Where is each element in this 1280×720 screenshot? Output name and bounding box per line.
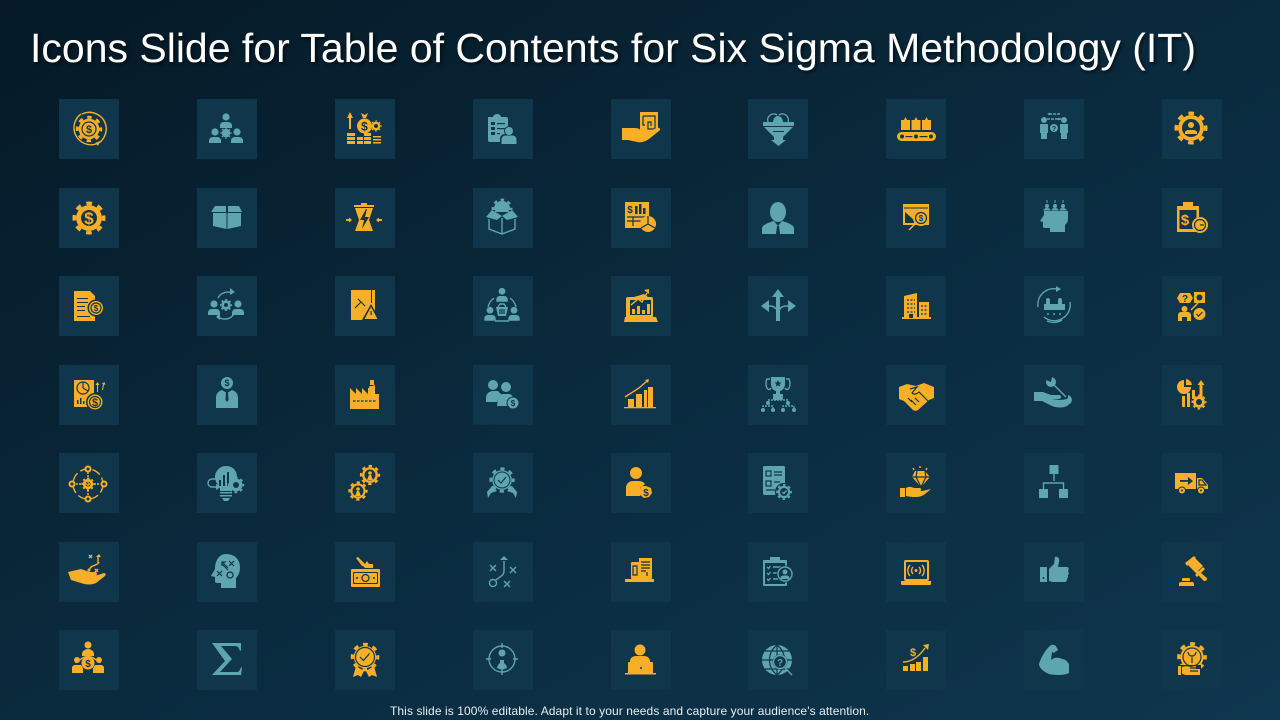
icon: person at laptop bbox=[611, 630, 671, 690]
icon: browser with magnifier: $ bbox=[919, 214, 924, 223]
icon: head with strategy bbox=[197, 542, 257, 602]
icon: globe with question: ? bbox=[777, 658, 783, 669]
icon: box with gear bbox=[473, 188, 533, 248]
icon: laptop with signal bbox=[886, 542, 946, 602]
icon: factory bbox=[335, 365, 395, 425]
icon: trophy hierarchy bbox=[748, 365, 808, 425]
icon: law book with warning bbox=[335, 276, 395, 336]
icon: money bag, gear and coins: $ bbox=[361, 120, 368, 134]
icon: two people with dollar bbox=[473, 365, 533, 425]
icon: network circle with gear bbox=[59, 453, 119, 513]
icon: conveyor with boxes bbox=[886, 99, 946, 159]
icon: laptop with documents bbox=[611, 542, 671, 602]
icon: hand with strategy path bbox=[59, 542, 119, 602]
icon: open box bbox=[197, 188, 257, 248]
icon: delivery truck bbox=[1162, 453, 1222, 513]
icon: gear with dollar and cycle bbox=[59, 99, 119, 159]
icon: clipboard dollar clock bbox=[1162, 188, 1222, 248]
icon: sigma bbox=[197, 630, 257, 690]
icon: businessman bbox=[748, 188, 808, 248]
icon: org chart bbox=[1024, 453, 1084, 513]
icon: two people with question: ? bbox=[1052, 126, 1056, 133]
icon: person with dollar head bbox=[197, 365, 257, 425]
icon: money bag, gear and coins bbox=[335, 99, 395, 159]
icon: people cycle with gear bbox=[197, 276, 257, 336]
icon: hand holding diamond bbox=[886, 453, 946, 513]
row 4 bbox=[59, 365, 1222, 425]
icon: group with dollar bbox=[59, 630, 119, 690]
icon: strategy play bbox=[473, 542, 533, 602]
icon: bars with dollar and arrow bbox=[886, 630, 946, 690]
icon: document chart and pie: $ bbox=[627, 205, 633, 216]
icon: badge with check and ribbons bbox=[473, 453, 533, 513]
icon: team with gear bbox=[197, 99, 257, 159]
icon: two people with dollar: $ bbox=[511, 399, 516, 408]
icon: dollar gear: $ bbox=[84, 209, 94, 228]
icon: person with dollar bbox=[611, 453, 671, 513]
icon: person with dollar: $ bbox=[643, 488, 649, 499]
icon: clipboard with person bbox=[748, 542, 808, 602]
icon: document chart and pie bbox=[611, 188, 671, 248]
icon: document with dollar coin: $ bbox=[94, 304, 99, 313]
icon: dollar gear bbox=[59, 188, 119, 248]
icon: document with dollar coin bbox=[59, 276, 119, 336]
row 1 bbox=[59, 99, 1222, 159]
icon: quality badge bbox=[335, 630, 395, 690]
icon: hand with wrench bbox=[1024, 365, 1084, 425]
icon: clipboard with person bbox=[473, 99, 533, 159]
icon: hourglass bin with lightning bbox=[335, 188, 395, 248]
row 5 bbox=[59, 453, 1222, 513]
icon: thumbs up bbox=[1024, 542, 1084, 602]
title: Icons Slide for Table of Contents for Six Sigma Methodology (IT) bbox=[30, 25, 1196, 71]
icon: report with dollar coin: $ bbox=[92, 397, 98, 409]
icon: pie bars gear arrow bbox=[1162, 365, 1222, 425]
icon: funnel with gears bbox=[748, 99, 808, 159]
icon: gear wrench hand bbox=[1162, 630, 1222, 690]
icon: hand holding maze bbox=[611, 99, 671, 159]
footer note: This slide is 100% editable. Adapt it to your needs and capture your audience's attention. bbox=[390, 704, 869, 718]
icon: bulb with chart and gear bbox=[197, 453, 257, 513]
icon: checklist with gear bbox=[748, 453, 808, 513]
icon: person with dollar head: $ bbox=[224, 378, 230, 388]
icon: flexed bicep bbox=[1024, 630, 1084, 690]
icon: handshake bbox=[886, 365, 946, 425]
row 7 bbox=[59, 630, 1222, 690]
icon: banknote with down arrow bbox=[335, 542, 395, 602]
icon: group with dollar: $ bbox=[85, 659, 91, 670]
icon: gear with dollar and cycle: $ bbox=[86, 124, 92, 136]
icon: bars with dollar and arrow: $ bbox=[910, 647, 916, 659]
icon: team around basket bbox=[473, 276, 533, 336]
icon: gavel bbox=[1162, 542, 1222, 602]
icon: head with people bbox=[1024, 188, 1084, 248]
icon: two people with question bbox=[1024, 99, 1084, 159]
icon: browser with magnifier bbox=[886, 188, 946, 248]
row 6 bbox=[59, 542, 1222, 602]
icon: globe with question bbox=[748, 630, 808, 690]
icon: target person bbox=[473, 630, 533, 690]
icon: circular factory bbox=[1024, 276, 1084, 336]
icon: question gear people check bbox=[1162, 276, 1222, 336]
icon: three way arrows bbox=[748, 276, 808, 336]
icon: laptop with chart bbox=[611, 276, 671, 336]
icon: report with dollar coin bbox=[59, 365, 119, 425]
icon: two gears with people bbox=[335, 453, 395, 513]
icon: buildings bbox=[886, 276, 946, 336]
icon: question gear people check: ? bbox=[1182, 294, 1188, 305]
icon: gear with person bbox=[1162, 99, 1222, 159]
icon: growth bar chart bbox=[611, 365, 671, 425]
icon: clipboard dollar clock: $ bbox=[1181, 212, 1190, 229]
row 2 bbox=[59, 188, 1222, 248]
row 3 bbox=[59, 276, 1222, 336]
